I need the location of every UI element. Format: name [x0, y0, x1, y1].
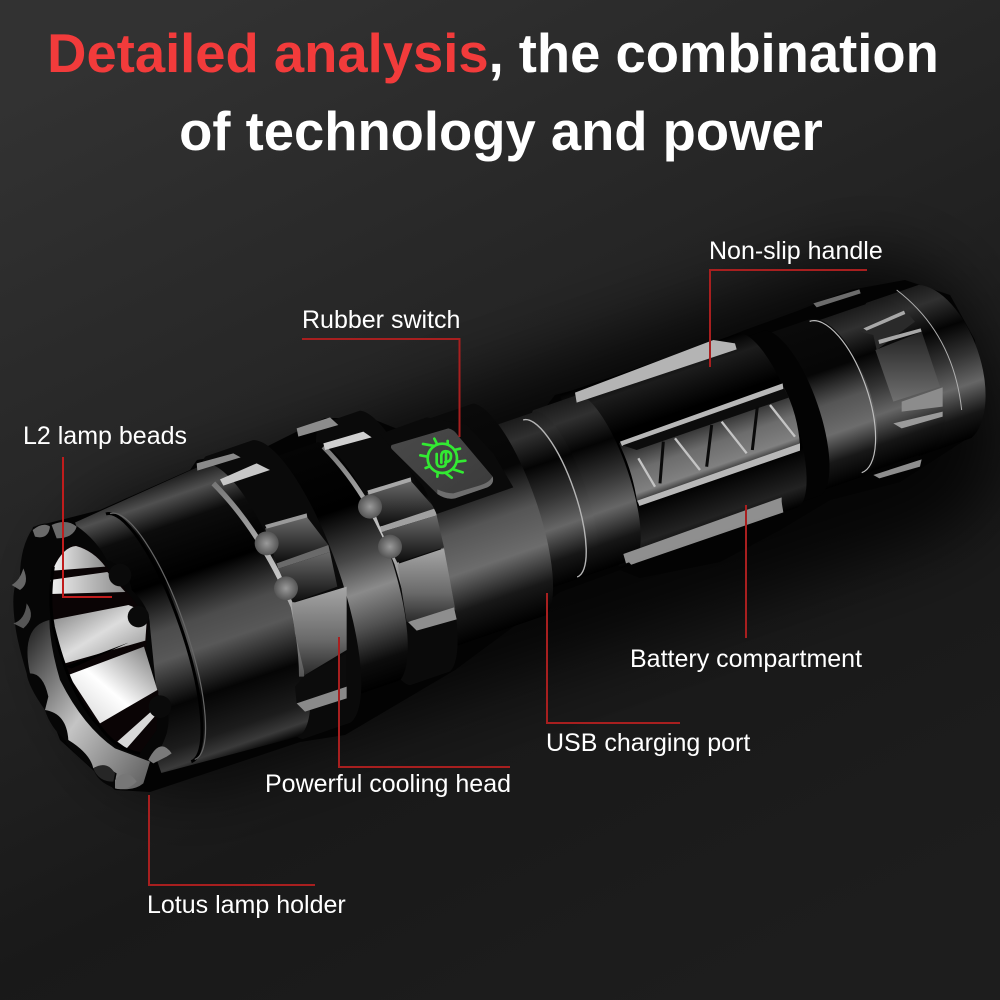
ring B — [299, 400, 480, 693]
switch base — [380, 417, 513, 514]
lower channel rail — [637, 443, 800, 506]
tail upper ribs — [813, 289, 861, 307]
neck — [713, 322, 846, 513]
title: Detailed analysis, the combination — [47, 23, 939, 84]
callout: Lotus lamp holder — [147, 795, 346, 919]
title — [47, 23, 939, 162]
switch body — [355, 394, 572, 656]
fin details front rings — [197, 453, 347, 712]
channel ribs — [660, 407, 757, 483]
callout: Battery compartment: Battery compartment — [630, 645, 862, 673]
head cylinder — [71, 451, 335, 782]
top strip grain — [575, 340, 737, 403]
callout: Non-slip handle: Non-slip handle — [709, 237, 883, 265]
middle band — [242, 432, 430, 707]
callout: USB charging port — [546, 593, 750, 757]
callout: L2 lamp beads — [23, 422, 187, 597]
collar — [733, 308, 895, 502]
title: of technology and power — [179, 101, 823, 162]
callout: Rubber switch — [302, 306, 460, 437]
tail center panel — [875, 332, 940, 402]
usb port band — [473, 404, 613, 596]
ring A — [180, 428, 387, 748]
crown bright rim — [27, 620, 150, 789]
callout: Powerful cooling head — [265, 637, 511, 798]
connector ring — [524, 388, 656, 578]
crown scallops — [33, 522, 77, 538]
ring A rim — [213, 483, 302, 677]
ring A upper ribs — [197, 453, 241, 471]
bottom grip strip — [623, 500, 785, 566]
callout: L2 lamp beads: L2 lamp beads — [23, 422, 187, 450]
callout: USB charging port: USB charging port — [546, 729, 750, 757]
tail cap — [857, 274, 1000, 459]
battery channel — [617, 385, 806, 503]
icon: green power symbol — [420, 439, 465, 478]
switch button — [391, 428, 493, 499]
flashlight shadow glow — [29, 229, 1000, 816]
callout: Rubber switch: Rubber switch — [302, 306, 460, 334]
reflector edge ring — [51, 567, 140, 753]
flashlight barrel sections — [69, 207, 1000, 786]
tail seam — [897, 290, 962, 410]
rear clip — [873, 459, 922, 478]
upper channel rail — [620, 383, 783, 446]
flashlight illustration — [12, 207, 1000, 792]
flashlight silhouette — [15, 280, 981, 792]
scallop notches — [109, 564, 171, 718]
bottom strip — [623, 497, 782, 563]
reflector wedges — [53, 546, 105, 571]
crown base — [13, 522, 169, 789]
callout: Powerful cooling head: Powerful cooling head — [265, 770, 511, 798]
callout: Lotus lamp holder: Lotus lamp holder — [147, 891, 346, 919]
ring B ribs — [297, 417, 338, 437]
tail knurled ring — [801, 289, 963, 478]
callout: Non-slip handle — [709, 237, 883, 367]
handle body — [560, 325, 823, 569]
lamp head crown and reflector — [12, 522, 172, 789]
tail lower ribs — [902, 387, 943, 412]
reflector backing — [51, 545, 158, 753]
ring B rim — [323, 447, 413, 623]
